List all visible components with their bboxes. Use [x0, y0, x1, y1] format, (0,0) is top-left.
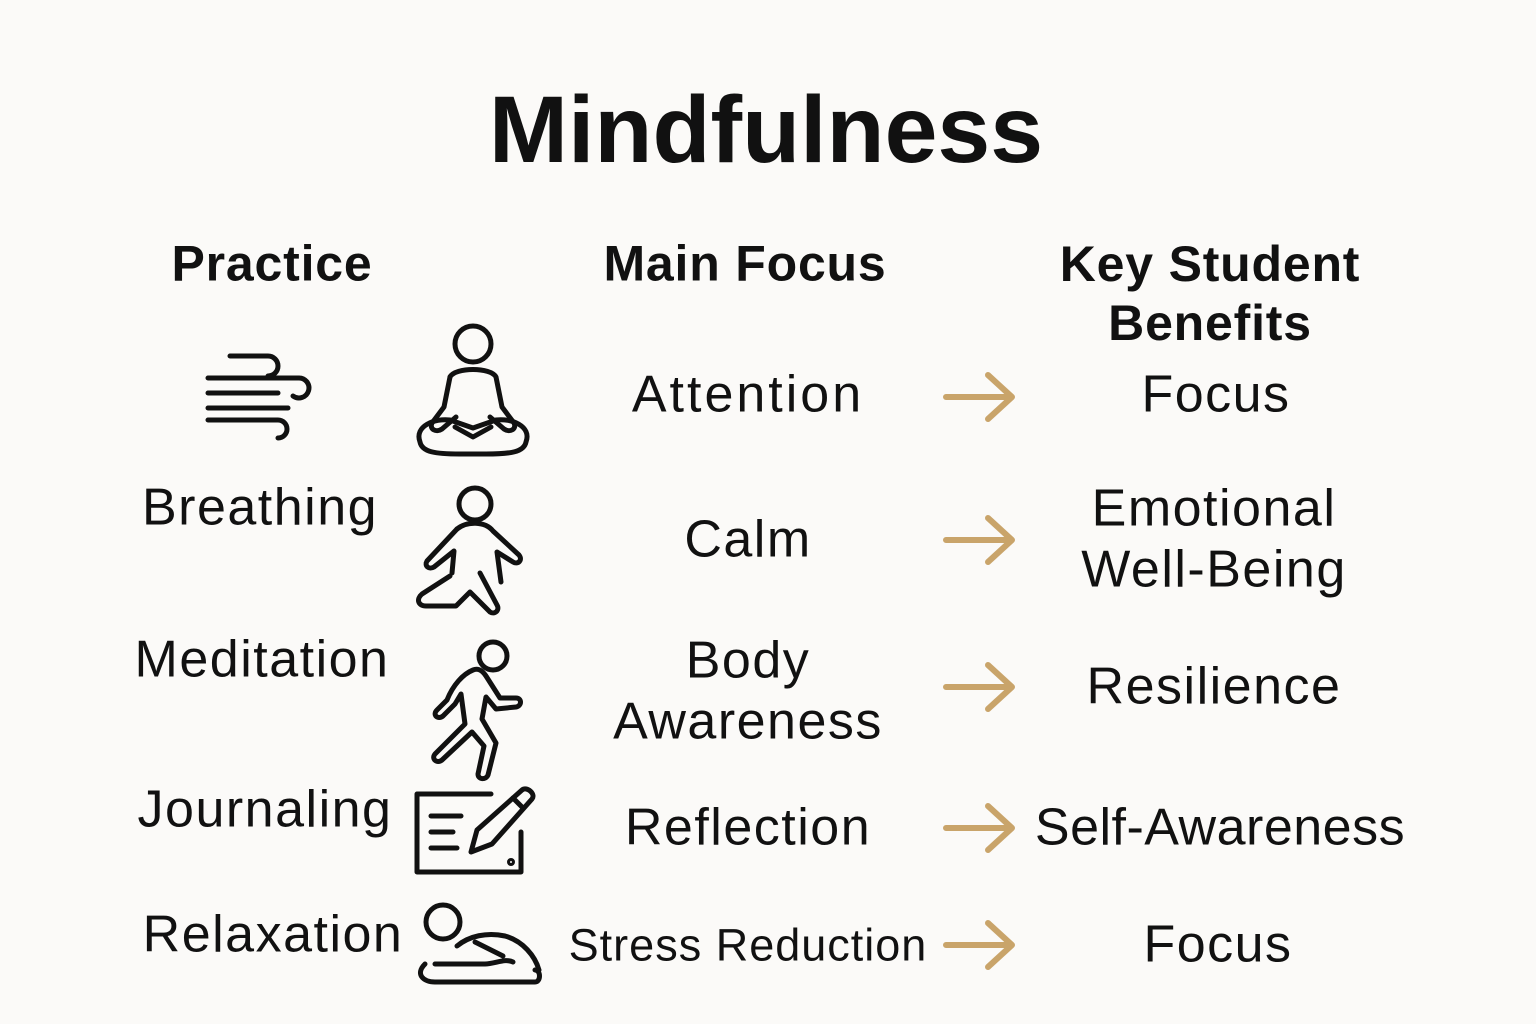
text: Emotional	[1092, 480, 1336, 538]
text: Stress Reduction	[569, 919, 927, 970]
heading: key student benefits	[1060, 236, 1360, 351]
icon: journaling	[414, 786, 536, 874]
text: Self-Awareness	[1035, 798, 1405, 856]
text: Reflection	[625, 798, 871, 856]
icon: wind	[206, 354, 312, 440]
heading: key student benefits: Key Student	[1060, 236, 1360, 292]
text: Awareness	[613, 693, 883, 751]
practice labels: Breathing	[142, 478, 378, 536]
icon: seated meditation	[416, 324, 530, 456]
benefit labels: Focus	[1141, 365, 1291, 423]
heading: key student benefits: Benefits	[1108, 295, 1312, 351]
icon: relaxation lying figure	[418, 902, 542, 984]
heading: practice: Practice	[172, 236, 372, 292]
text: Well-Being	[1081, 541, 1347, 599]
icon: walking figure	[431, 640, 523, 782]
text: Focus	[1143, 915, 1293, 973]
text: Relaxation	[143, 905, 403, 963]
text: Journaling	[138, 780, 392, 838]
text: Calm	[684, 510, 812, 568]
title: Mindfulness	[489, 77, 1043, 183]
icon: breathing figure	[416, 486, 523, 616]
text: Resilience	[1087, 657, 1341, 715]
main focus labels: Attention	[632, 365, 864, 423]
heading: main focus: Main Focus	[603, 236, 887, 292]
text: Meditation	[135, 630, 389, 688]
arrows	[943, 372, 1015, 970]
text: Body	[686, 632, 810, 690]
